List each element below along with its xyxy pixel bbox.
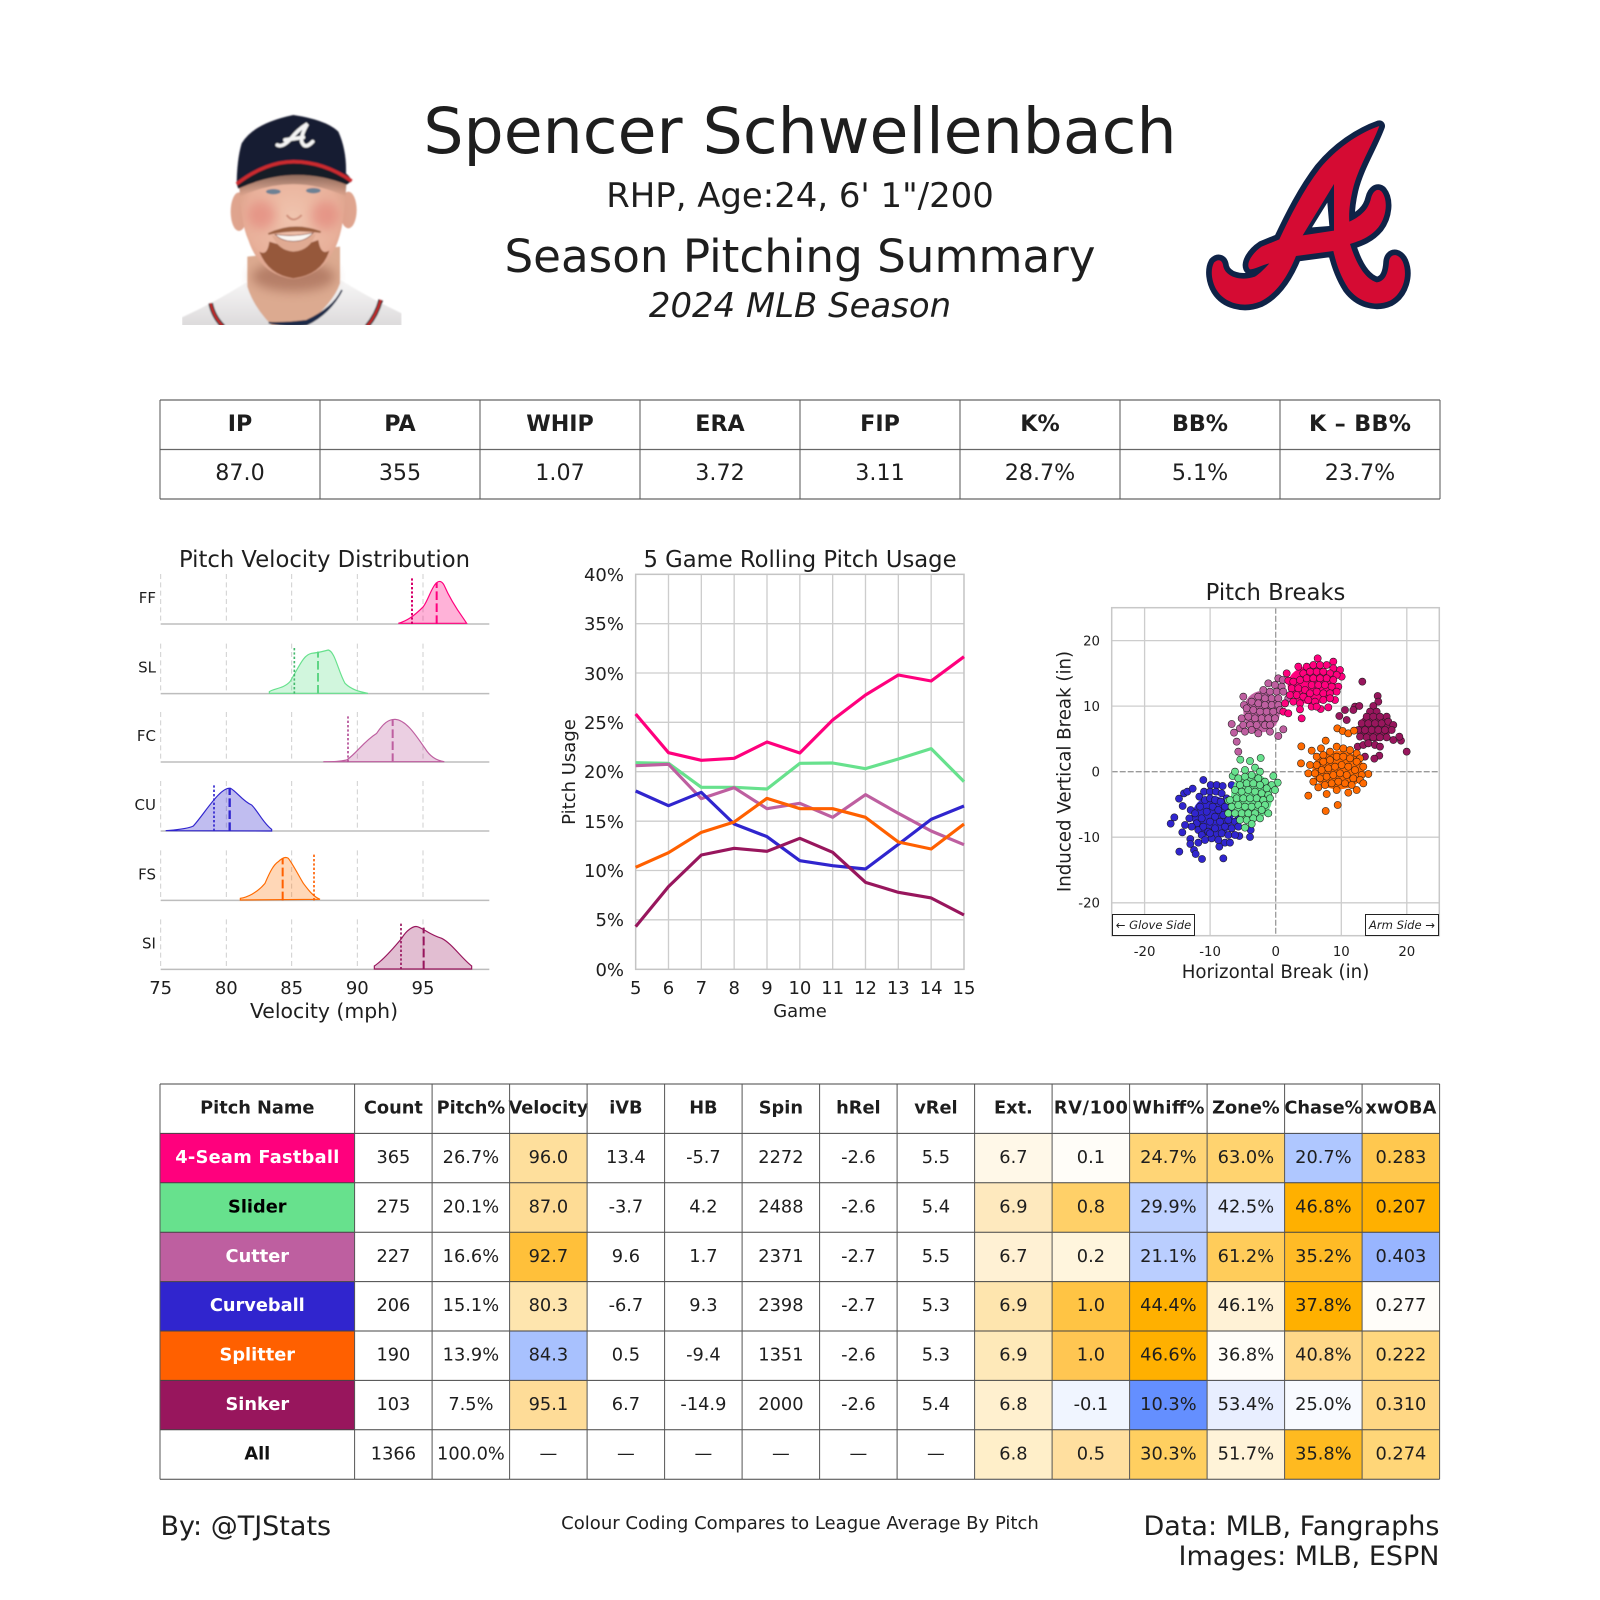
usage x axis ticks: 9 [761, 978, 773, 999]
credit: sources [1144, 1511, 1440, 1572]
row: Splitter: 1.0 [1077, 1345, 1105, 1366]
table header row: Whiff% [1132, 1098, 1205, 1118]
row: Cutter: 5.5 [922, 1246, 950, 1267]
row: Splitter: 6.9 [999, 1345, 1028, 1366]
row: Cutter: 9.6 [612, 1246, 640, 1267]
row: Curveball: -6.7 [609, 1295, 643, 1316]
breaks y axis ticks: -20 [1078, 896, 1100, 912]
row: Cutter: 16.6% [443, 1246, 499, 1267]
row: Cutter: 35.2% [1295, 1246, 1352, 1267]
row: Splitter: 190 [376, 1345, 410, 1366]
row: 4-Seam Fastball: 0.283 [1375, 1147, 1426, 1168]
row: Sinker: 2000 [758, 1394, 804, 1415]
row: Slider: 275 [376, 1196, 410, 1217]
row: Cutter: -2.7 [841, 1246, 876, 1267]
row: 4-Seam Fastball: 4-Seam Fastball [175, 1147, 339, 1168]
line: Slider [636, 749, 964, 789]
row: Splitter: 36.8% [1218, 1345, 1274, 1366]
density row: FS: FS [138, 865, 156, 883]
line: Splitter [636, 798, 964, 867]
row: 4-Seam Fastball: 20.7% [1295, 1147, 1352, 1168]
row: Curveball [160, 1282, 1440, 1331]
table header row: vRel [914, 1098, 958, 1118]
stats header row: WHIP [526, 411, 594, 437]
row: Cutter: 227 [376, 1246, 410, 1267]
usage x axis ticks: 5 [630, 978, 641, 999]
density row: SL: SL [138, 658, 157, 676]
velocity x axis label: Velocity (mph) [250, 999, 398, 1023]
row: Splitter: 84.3 [529, 1345, 568, 1366]
row: Cutter: 6.7 [999, 1246, 1028, 1267]
row: Sinker: 6.7 [612, 1394, 640, 1415]
breaks x axis ticks [1134, 945, 1415, 960]
row: 4-Seam Fastball: 24.7% [1140, 1147, 1197, 1168]
team logo [1212, 126, 1405, 305]
row: Slider: 5.4 [922, 1196, 950, 1217]
row: Slider: 0.207 [1375, 1196, 1426, 1217]
row: All: 35.8% [1295, 1443, 1352, 1464]
usage y axis ticks: 40% [584, 565, 624, 586]
row: Curveball: 37.8% [1295, 1295, 1352, 1316]
row: Curveball: 2398 [758, 1295, 804, 1316]
row: 4-Seam Fastball: -2.6 [841, 1147, 876, 1168]
stats values row: 355 [379, 460, 421, 486]
usage x axis ticks: 6 [663, 978, 674, 999]
line: Curveball [636, 791, 964, 869]
row: 4-Seam Fastball: 63.0% [1218, 1147, 1274, 1168]
density row: SL [138, 644, 489, 694]
cluster: Sinker [1336, 678, 1410, 762]
row: Curveball: 5.3 [922, 1295, 950, 1316]
row: Sinker [160, 1380, 1440, 1430]
row: Splitter: 1351 [758, 1345, 804, 1366]
row: 4-Seam Fastball: 6.7 [999, 1147, 1028, 1168]
subtitle: Season Pitching Summary [504, 230, 1096, 283]
arm side callout [1366, 914, 1438, 936]
breaks y axis ticks: 20 [1083, 634, 1100, 650]
row: Cutter: 1.7 [689, 1246, 718, 1267]
row: Cutter: 92.7 [529, 1246, 568, 1267]
row: Sinker: 25.0% [1295, 1394, 1352, 1415]
usage y axis ticks [584, 565, 624, 981]
density row: CU: CU [135, 796, 156, 814]
table header row: RV/100 [1054, 1098, 1128, 1118]
row: Slider: 6.9 [999, 1196, 1028, 1217]
row: Sinker: 95.1 [529, 1394, 568, 1415]
breaks y axis ticks: 10 [1083, 700, 1100, 715]
density row: FF [139, 574, 489, 624]
stats header row: K – BB% [1309, 411, 1411, 437]
usage y axis ticks: 35% [584, 614, 624, 635]
row: Splitter [160, 1331, 1440, 1380]
stats values row: 28.7% [1005, 460, 1075, 486]
breaks y axis ticks: 0 [1092, 766, 1100, 780]
row: Slider: 20.1% [443, 1196, 499, 1217]
row: Slider: 42.5% [1218, 1196, 1274, 1217]
row: Slider: 46.8% [1295, 1196, 1352, 1217]
row: Slider: 4.2 [689, 1196, 718, 1217]
row: Sinker: 53.4% [1218, 1394, 1274, 1415]
scatter points [1167, 655, 1410, 863]
density row: FS [138, 850, 489, 900]
row: All: — [617, 1443, 635, 1464]
row: Cutter: Cutter [226, 1246, 289, 1267]
row: 4-Seam Fastball: 365 [376, 1147, 410, 1168]
usage x axis ticks: 8 [728, 978, 740, 999]
row: Slider [160, 1183, 1440, 1232]
row: Slider: 2488 [758, 1196, 804, 1217]
stats values row [215, 460, 1395, 486]
usage x axis ticks: 12 [854, 978, 877, 999]
table header row: Chase% [1284, 1098, 1363, 1118]
breaks grid [1112, 608, 1439, 936]
breaks x axis ticks: 20 [1398, 945, 1415, 960]
velocity x axis ticks: 90 [346, 978, 369, 999]
line: Cutter [636, 764, 964, 845]
season: 2024 MLB Season [649, 286, 951, 325]
glove side callout: ← Glove Side [1116, 918, 1191, 932]
row: All: 100.0% [437, 1443, 505, 1464]
table header row: Spin [759, 1098, 803, 1118]
breaks y axis label: Induced Vertical Break (in) [1054, 651, 1076, 892]
glove side callout [1112, 914, 1194, 936]
row: Curveball: 9.3 [689, 1295, 718, 1316]
velocity x axis ticks [149, 978, 434, 999]
row: Slider: -2.6 [841, 1196, 876, 1217]
row: Curveball: Curveball [210, 1295, 305, 1316]
row: All: — [540, 1443, 557, 1464]
usage y axis ticks: 25% [584, 713, 624, 734]
row: Curveball: 0.277 [1375, 1295, 1426, 1316]
row: All: 0.5 [1077, 1443, 1105, 1464]
row: Slider: 29.9% [1140, 1196, 1197, 1217]
usage x axis ticks: 13 [887, 978, 910, 999]
stats header row: PA [384, 411, 417, 437]
row: Curveball: -2.7 [841, 1295, 876, 1316]
breaks chart title: Pitch Breaks [1206, 580, 1345, 606]
line: Sinker [636, 838, 964, 927]
usage x axis ticks: 10 [788, 978, 811, 999]
row: Sinker: 5.4 [922, 1394, 950, 1415]
footer [160, 1511, 1440, 1572]
credit: author: By: @TJStats [160, 1511, 331, 1542]
velocity x axis ticks: 75 [149, 978, 172, 999]
row: Curveball: 15.1% [443, 1295, 499, 1316]
stats header row: ERA [695, 411, 746, 437]
row: Slider: Slider [228, 1196, 287, 1217]
table header row: Pitch% [437, 1098, 505, 1118]
table header row: Pitch Name [200, 1098, 314, 1118]
row: Splitter: 0.222 [1375, 1345, 1426, 1366]
row: Slider: 87.0 [529, 1196, 568, 1217]
row: Sinker: 10.3% [1140, 1394, 1197, 1415]
player bio: RHP, Age:24, 6' 1"/200 [606, 176, 994, 215]
season stats table [160, 400, 1440, 499]
density row: SI: SI [142, 934, 156, 952]
usage y axis ticks: 15% [584, 812, 624, 833]
usage x axis label: Game [773, 1001, 827, 1022]
stats values row: 1.07 [535, 460, 585, 486]
row: Sinker: 7.5% [448, 1394, 493, 1415]
stats header row: FIP [860, 411, 900, 437]
cluster: Cutter [1228, 675, 1292, 755]
table header row: hRel [836, 1098, 881, 1118]
table header row: Ext. [994, 1098, 1033, 1118]
stats values row: 3.72 [695, 460, 745, 486]
row: All: — [927, 1443, 945, 1464]
panel: rolling pitch usage [559, 547, 975, 1022]
row: Splitter: -9.4 [686, 1345, 721, 1366]
density row: SI [142, 919, 489, 969]
row: Curveball: 80.3 [529, 1295, 568, 1316]
usage x axis ticks: 7 [696, 978, 707, 999]
usage x axis ticks: 14 [920, 978, 943, 999]
stats values row: 5.1% [1172, 460, 1228, 486]
stats header row [228, 411, 1411, 437]
row: Sinker: Sinker [225, 1394, 289, 1415]
line: 4-Seam Fastball [636, 657, 964, 760]
velocity x axis ticks: 95 [412, 978, 434, 999]
usage line chart [636, 574, 964, 969]
row: Slider: 0.8 [1077, 1196, 1105, 1217]
credit: sources: Data: MLB, Fangraphs [1144, 1511, 1440, 1542]
row: All: 30.3% [1140, 1443, 1197, 1464]
row: Cutter: 2371 [758, 1246, 804, 1267]
row: All: — [772, 1443, 790, 1464]
usage x axis ticks: 11 [821, 978, 844, 999]
stats values row: 3.11 [855, 460, 905, 486]
usage x axis ticks [630, 978, 975, 999]
row: Sinker: -2.6 [841, 1394, 876, 1415]
breaks y axis ticks: -10 [1078, 831, 1100, 846]
table header row: xwOBA [1365, 1098, 1437, 1118]
breaks x axis label: Horizontal Break (in) [1182, 962, 1369, 983]
row: Splitter: 0.5 [612, 1345, 640, 1366]
row: All [244, 1430, 1440, 1479]
credit: sources: Images: MLB, ESPN [1178, 1541, 1440, 1572]
cluster: Splitter [1297, 725, 1372, 815]
density row: FC [137, 712, 489, 762]
usage y axis ticks: 5% [595, 910, 624, 931]
player photo [182, 115, 402, 327]
cluster: Curveball [1167, 776, 1254, 863]
row: 4-Seam Fastball: 13.4 [606, 1147, 646, 1168]
row: 4-Seam Fastball: -5.7 [686, 1147, 721, 1168]
player name: Spencer Schwellenbach [423, 94, 1177, 168]
row: All: All [244, 1443, 270, 1464]
usage y axis label: Pitch Usage [559, 719, 580, 825]
table header row: HB [689, 1098, 718, 1118]
density row: FC: FC [137, 727, 156, 745]
breaks y axis ticks [1078, 634, 1100, 912]
stats header row: IP [228, 411, 252, 437]
velocity chart title: Pitch Velocity Distribution [179, 547, 470, 573]
row: Cutter: 0.2 [1077, 1246, 1105, 1267]
row: Curveball: 1.0 [1077, 1295, 1105, 1316]
usage x axis ticks: 15 [953, 978, 975, 999]
panel: pitch breaks [1054, 580, 1439, 983]
density row: CU [135, 781, 489, 831]
row: Curveball: 6.9 [999, 1295, 1028, 1316]
row: Splitter: 13.9% [443, 1345, 499, 1366]
row: All: 51.7% [1218, 1443, 1274, 1464]
row: All: 0.274 [1375, 1443, 1426, 1464]
row: Slider: -3.7 [609, 1196, 643, 1217]
table header row: Velocity [508, 1098, 589, 1118]
arm side callout: Arm Side → [1368, 918, 1435, 932]
table header row: Count [364, 1098, 423, 1118]
breaks x axis ticks: -20 [1134, 945, 1155, 960]
usage y axis ticks: 0% [595, 960, 624, 981]
row: Splitter: -2.6 [841, 1345, 876, 1366]
breaks x axis ticks: -10 [1199, 945, 1221, 960]
pitch metrics table [160, 1084, 1440, 1479]
row: All: 1366 [371, 1443, 416, 1464]
usage chart title: 5 Game Rolling Pitch Usage [643, 547, 957, 573]
table header row [200, 1098, 1437, 1118]
row: Splitter: 40.8% [1295, 1345, 1352, 1366]
row: All: — [695, 1443, 712, 1464]
row: Splitter: 46.6% [1140, 1345, 1197, 1366]
row: Splitter: Splitter [220, 1345, 295, 1366]
row: Cutter: 0.403 [1375, 1246, 1426, 1267]
usage y axis ticks: 30% [584, 664, 624, 685]
row: Splitter: 5.3 [922, 1345, 950, 1366]
stats header row: K% [1020, 411, 1060, 437]
row: 4-Seam Fastball: 0.1 [1077, 1147, 1105, 1168]
velocity x axis ticks: 80 [215, 978, 238, 999]
row: 4-Seam Fastball: 26.7% [443, 1147, 499, 1168]
row: Cutter [160, 1232, 1440, 1282]
row: Curveball: 206 [376, 1295, 410, 1316]
header [182, 94, 1405, 327]
row: All: — [850, 1443, 867, 1464]
row: Sinker: 6.8 [999, 1394, 1028, 1415]
colour coding note: Colour Coding Compares to League Average By Pitch [561, 1513, 1039, 1534]
row: 4-Seam Fastball: 2272 [758, 1147, 804, 1168]
row: Sinker: 0.310 [1375, 1394, 1426, 1415]
usage y axis ticks: 10% [584, 861, 624, 882]
usage y axis ticks: 20% [584, 762, 624, 783]
table header row: iVB [609, 1098, 643, 1118]
density row: FF: FF [139, 589, 156, 607]
table header row: Zone% [1212, 1098, 1280, 1118]
panel: pitch velocity distribution [135, 547, 489, 1023]
row: Sinker: 103 [376, 1394, 410, 1415]
row: All: 6.8 [999, 1443, 1028, 1464]
stats header row: BB% [1172, 411, 1228, 437]
row: 4-Seam Fastball: 5.5 [922, 1147, 950, 1168]
row: Cutter: 61.2% [1218, 1246, 1274, 1267]
stats values row: 87.0 [215, 460, 265, 486]
stats values row: 23.7% [1325, 460, 1395, 486]
density rows [135, 574, 489, 969]
row: Cutter: 21.1% [1140, 1246, 1197, 1267]
cluster: 4-Seam Fastball [1280, 655, 1345, 722]
cluster: Slider [1225, 754, 1281, 831]
row: Curveball: 44.4% [1140, 1295, 1197, 1316]
breaks x axis ticks: 0 [1271, 945, 1280, 960]
row: 4-Seam Fastball: 96.0 [529, 1147, 568, 1168]
breaks x axis ticks: 10 [1333, 945, 1350, 960]
row: 4-Seam Fastball [160, 1133, 1440, 1183]
row: Curveball: 46.1% [1218, 1295, 1274, 1316]
velocity x axis ticks: 85 [280, 978, 303, 999]
row: Sinker: -14.9 [680, 1394, 726, 1415]
row: Sinker: -0.1 [1074, 1394, 1108, 1415]
